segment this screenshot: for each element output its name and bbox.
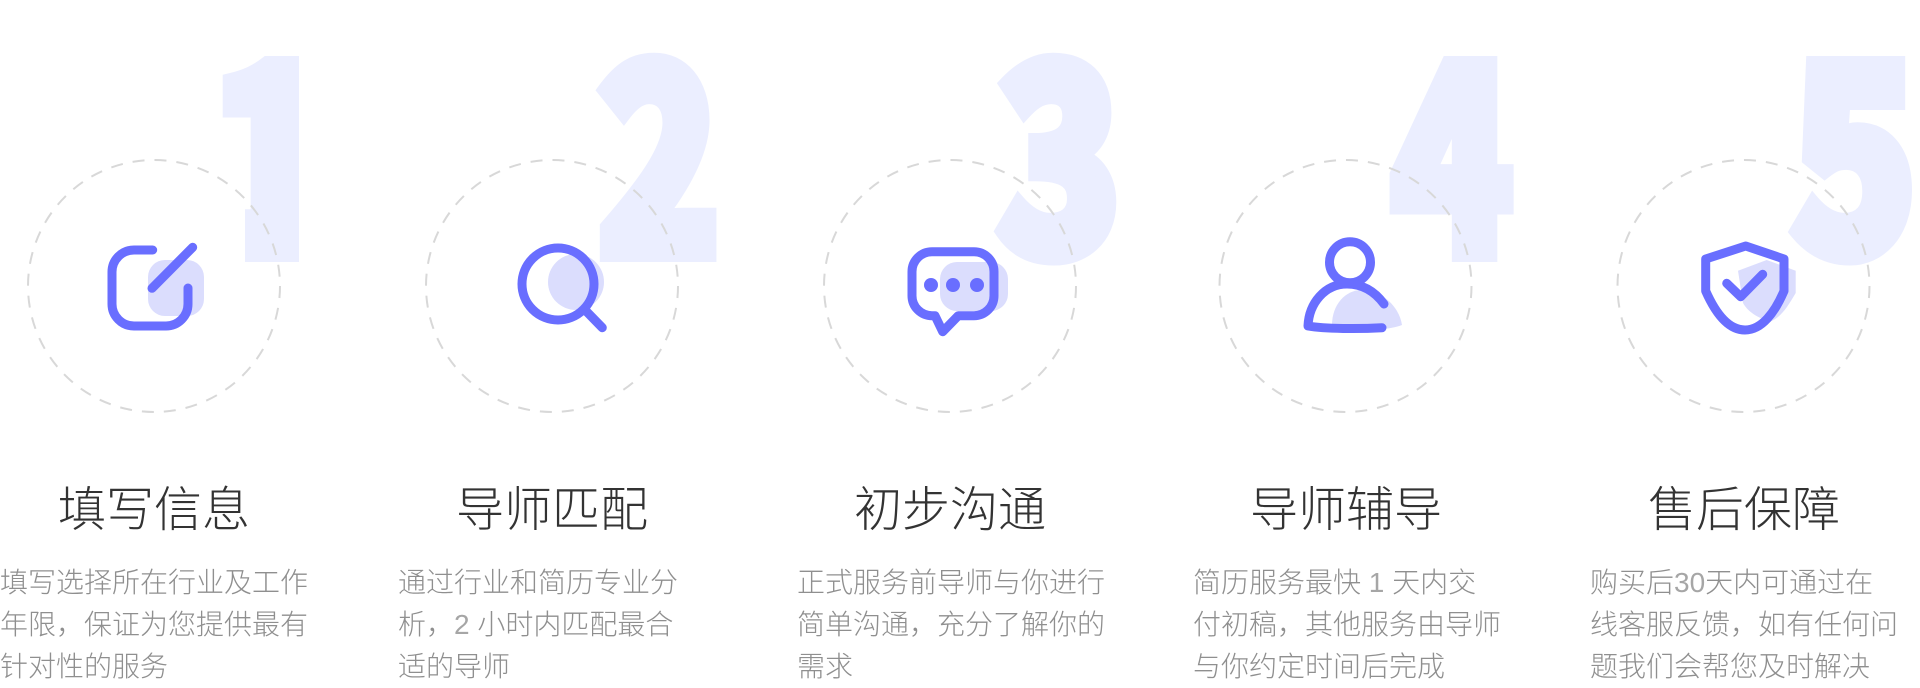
description: step 1	[0, 567, 308, 682]
description: step 2	[398, 567, 678, 682]
heading: step 2: 导师匹配	[456, 484, 648, 537]
description: step 4	[1193, 567, 1501, 682]
icon: person	[1308, 242, 1402, 330]
heading: step 4: 导师辅导	[1250, 484, 1442, 537]
description: step 1: 针对性的服务	[0, 651, 168, 682]
heading: step 1: 填写信息	[58, 484, 250, 537]
dashed circle	[1618, 160, 1870, 412]
heading: step 3: 初步沟通	[854, 484, 1046, 537]
description: step 4: 简历服务最快 1 天内交	[1193, 567, 1476, 598]
step 4 graphic	[1218, 0, 1514, 413]
step 3 graphic	[823, 0, 1121, 413]
dashed circle	[426, 160, 678, 412]
heading: step 5: 售后保障	[1648, 484, 1840, 537]
step 5: after-sales guarantee	[1590, 0, 1917, 682]
step 2 graphic	[425, 0, 720, 413]
description: step 4: 付初稿，其他服务由导师	[1193, 609, 1501, 640]
description: step 2: 适的导师	[398, 651, 510, 682]
dashed circle	[824, 160, 1076, 412]
step 3: initial communication	[797, 0, 1121, 682]
description: step 3: 需求	[797, 651, 853, 682]
description: step 2: 通过行业和简历专业分	[398, 567, 678, 598]
description: step 1: 年限，保证为您提供最有	[0, 609, 308, 640]
icon: magnifier	[522, 248, 604, 328]
step 1 graphic	[27, 56, 299, 413]
description: step 3: 正式服务前导师与你进行	[797, 567, 1105, 598]
description: step 5: 题我们会帮您及时解决	[1590, 651, 1870, 682]
description: step 3	[797, 567, 1105, 682]
step 2: mentor matching	[398, 0, 720, 682]
description: step 2: 析，2 小时内匹配最合	[398, 609, 673, 640]
description: step 1: 填写选择所在行业及工作	[0, 567, 308, 598]
description: step 3: 简单沟通，充分了解你的	[797, 609, 1105, 640]
icon: edit	[112, 247, 204, 326]
icon: shield	[1706, 246, 1796, 330]
description: step 5: 线客服反馈，如有任何问	[1590, 609, 1898, 640]
dashed circle	[28, 160, 280, 412]
step 4: mentor coaching	[1193, 0, 1514, 682]
description: step 5	[1590, 567, 1898, 682]
description: step 5: 购买后30天内可通过在	[1590, 567, 1873, 598]
description: step 4: 与你约定时间后完成	[1193, 651, 1445, 682]
step 1: fill in information	[0, 56, 308, 682]
dashed circle	[1220, 160, 1472, 412]
icon: chat bubble	[912, 252, 1008, 332]
step 5 graphic	[1616, 0, 1917, 413]
